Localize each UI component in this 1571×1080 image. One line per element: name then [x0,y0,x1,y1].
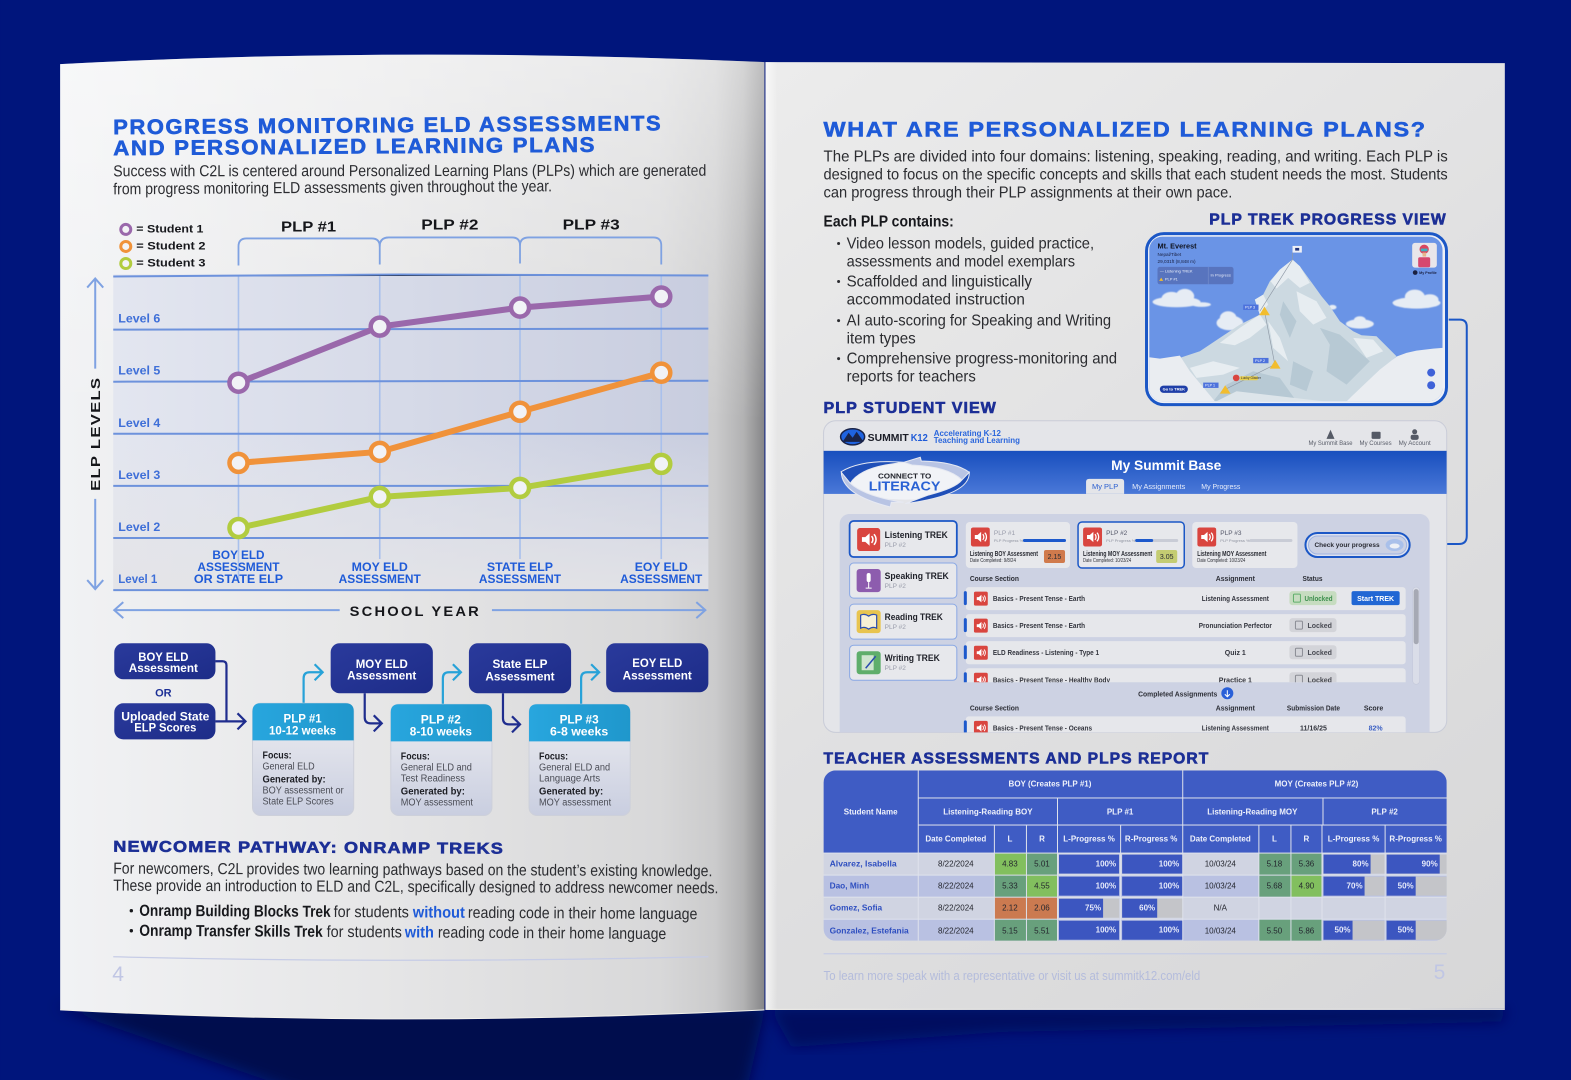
assignment table headers: Course Section [970,576,1019,583]
mountain trek view: My Profile [1419,271,1437,275]
x axis labels: ASSESSMENT [339,574,421,586]
summit logo: SUMMIT [868,433,909,444]
school year axis: SCHOOL YEAR [350,604,481,619]
teacher report table: L [1007,835,1012,844]
plp card 2: PLP #2 [1106,530,1128,537]
left page [60,55,764,1019]
progress bars [1059,855,1447,940]
card: plp 3: PLP #3 [560,714,599,726]
flow connectors [215,661,599,732]
title: progress monitoring: PROGRESS MONITORING ELD ASSESSMENTS [113,112,662,139]
table values: 5.86 [1299,927,1315,936]
blue banner: My Summit Base [1111,457,1221,473]
box: eoy eld: EOY ELD [632,658,682,670]
avatar [1412,243,1437,268]
heading: teacher report: TEACHER ASSESSMENTS AND PLPS REPORT [824,750,1209,767]
plp card 2: Date Completed: 10/23/24 [1083,558,1131,564]
plp flags: PLP 1 [1205,384,1215,388]
card: plp 2: Generated by: [401,785,465,797]
teacher report table: R-Progress % [1389,835,1442,844]
blue banner: My PLP [1092,482,1118,491]
progress bars: 100% [1159,926,1179,935]
assignment rows: Locked [1307,650,1332,657]
plp card 1: PLP #1 [994,530,1015,537]
intro text [113,162,706,198]
assignment rows: ELD Readiness - Listening - Type 1 [993,650,1099,657]
newcomer bullets: reading code in their home language [438,924,666,943]
table values: 5.33 [1002,882,1018,891]
teacher report table: Listening-Reading MOY [1207,808,1298,817]
newcomer paragraph: These provide an introduction to ELD and C2L, specifically designed to address newcomer needs. [113,877,718,897]
card: plp 1: State ELP Scores [263,795,334,807]
teacher report table: R [1039,835,1045,844]
top nav: My Courses [1360,441,1392,447]
level labels: Level 4 [118,418,161,430]
table values: 2.12 [1002,904,1018,913]
teacher report table: Date Completed [1190,835,1251,844]
student 3 line [229,455,670,537]
card: plp 2 [391,704,492,816]
mountain trek view: In Progress [1211,273,1231,278]
title: progress monitoring [113,112,662,160]
level labels [118,314,161,586]
teacher report table: R-Progress % [1125,835,1177,844]
legend: = Student 2 [136,240,205,252]
each plp contains list: assessments and model exemplars [847,252,1075,270]
x axis labels: ASSESSMENT [620,574,702,586]
plp card 2 [1078,522,1184,568]
top nav [1308,429,1431,447]
table header [824,770,1447,853]
table values: 5.18 [1267,860,1283,869]
box: uploaded state [114,703,215,739]
card: plp 1: 10-12 weeks [269,725,336,737]
table values: N/A [1214,904,1228,913]
assignment rows: Quiz 1 [1225,650,1246,657]
summit logo [841,428,1020,445]
trek tabs: PLP #2 [885,583,906,590]
level labels: Level 6 [118,314,160,326]
inner dashboard panel [840,514,1430,754]
intro paragraph [824,147,1448,201]
plp card 2: PLP Progress % [1106,538,1136,543]
card: plp 1: General ELD [263,760,315,772]
assignment table headers: Status [1302,576,1323,583]
newcomer bullets: Onramp Transfer Skills Trek [139,922,323,941]
progress bars: 100% [1096,860,1116,869]
assignment rows: Basics - Present Tense - Earth [993,596,1085,603]
box: uploaded state: ELP Scores [134,722,196,734]
table values: 5.15 [1002,927,1018,936]
page number 4: 4 [112,963,124,986]
teacher report table: R [1304,835,1310,844]
box: moy eld: MOY ELD [356,659,408,671]
progress bars: 90% [1422,860,1438,869]
student 2 line [229,364,670,472]
table values: 5.50 [1267,927,1283,936]
top nav: My Account [1399,441,1431,447]
box: uploaded state: Uploaded State [121,711,210,723]
blue banner: My Progress [1201,482,1241,491]
title: progress monitoring: AND PERSONALIZED LEARNING PLANS [113,134,596,160]
teacher report table [824,770,1447,941]
progress bars: 80% [1353,860,1369,869]
completed assignments: Submission Date [1287,705,1340,712]
line chart [113,275,708,590]
assignment rows [964,587,1406,691]
each plp contains list: Scaffolded and linguistically [847,273,1032,291]
table values: 8/22/2024 [938,927,974,936]
elp levels axis [87,279,103,589]
completed assignments: Score [1364,705,1383,712]
newcomer paragraph [113,860,718,897]
card: plp 1: Generated by: [263,773,326,785]
assignment rows: Basics - Present Tense - Earth [993,623,1085,630]
progress bars: 50% [1398,882,1414,891]
plp card 2: Listening MOY Assessment [1083,551,1153,558]
teacher report table: MOY (Creates PLP #2) [1275,779,1359,788]
intro text: Success with C2L is centered around Personalized Learning Plans (PLPs) which are generated [113,162,706,180]
assignment rows: Locked [1307,677,1332,684]
table values: 4.83 [1002,860,1018,869]
plp card 1: PLP Progress % [994,538,1024,543]
card: plp 2: Test Readiness [401,772,465,784]
blue banner: My Assignments [1132,482,1185,491]
plp card 3: PLP #3 [1220,530,1242,537]
plp brackets [238,216,661,265]
newcomer bullets: without [412,903,466,922]
trek tabs: Reading TREK [885,612,943,623]
table rows background [824,854,1447,941]
completed assignments: Listening Assessment [1202,725,1269,732]
progress bars: 100% [1159,882,1179,891]
table values: 8/22/2024 [938,882,974,891]
assignment rows: Locked [1307,623,1332,630]
level labels: Level 1 [118,574,158,586]
elp levels axis: ELP LEVELS [88,377,103,491]
teacher report table: Listening-Reading BOY [943,808,1033,817]
student names: Gonzalez, Estefania [830,926,909,936]
x axis labels: OR STATE ELP [194,574,283,586]
progress bars: 60% [1139,904,1155,913]
newcomer bullets: with [404,923,434,942]
connect to literacy logo [841,457,969,507]
card: plp 1 [253,703,354,816]
connector line [1411,320,1467,544]
plp card 1 [966,522,1070,568]
table values [938,860,1315,936]
newcomer bullets: for students [334,903,409,921]
right page [765,62,1505,1010]
check your progress pill [1305,533,1410,557]
x axis labels: MOY ELD [352,562,408,574]
card: plp 1: BOY assessment or [263,784,344,796]
level labels: Level 5 [118,366,161,378]
card: plp 3: Language Arts [539,772,600,784]
newcomer bullets: reading code in their home language [468,904,697,923]
progress bars: 75% [1085,904,1101,913]
table values: 10/03/24 [1205,860,1236,869]
plp flags: PLP 2 [1255,359,1265,363]
mountain trek view: — Listening TREK [1160,269,1193,274]
plp brackets: PLP #3 [563,216,620,233]
completed assignments: 11/16/25 [1300,725,1327,732]
box: boy eld [114,643,215,679]
x axis labels: BOY ELD [212,550,265,562]
student names: Gomez, Sofia [830,903,883,913]
teacher report table: L-Progress % [1063,835,1115,844]
card: plp 2: Focus: [401,750,430,762]
summit logo: Accelerating K-12 [934,428,1001,438]
table values: 5.36 [1299,860,1315,869]
connect to literacy logo: CONNECT TO [878,473,932,480]
level labels: Level 2 [118,522,160,534]
progress bars: 50% [1398,926,1414,935]
plp brackets: PLP #1 [281,218,336,235]
x axis labels [194,550,702,586]
footer note: To learn more speak with a representative or visit us at summitk12.com/eld [824,969,1200,983]
assignment rows: Unlocked [1304,596,1333,603]
progress bars: 100% [1159,860,1179,869]
each plp contains list: Comprehensive progress-monitoring and [847,350,1117,368]
box: moy eld: Assessment [347,670,416,682]
legend [121,223,205,269]
completed assignments [964,687,1406,732]
trek tabs: PLP #2 [885,624,906,631]
connect to literacy logo: LITERACY [869,478,941,493]
each plp contains list: reports for teachers [847,368,976,386]
heading: student view: PLP STUDENT VIEW [824,400,997,417]
box: moy eld [331,643,433,693]
table values: 5.51 [1034,927,1050,936]
assignment rows: Start TREK [1357,596,1394,603]
assignment rows: Basics - Present Tense - Healthy Body [993,677,1110,684]
box: boy eld: BOY ELD [138,652,188,664]
plp card 3: PLP Progress % [1220,538,1250,543]
student 1 line [229,288,670,392]
student view screenshot [824,421,1447,754]
title: what are plps: WHAT ARE PERSONALIZED LEARNING PLANS? [824,118,1427,141]
box: state elp: State ELP [492,659,548,671]
x axis labels: STATE ELP [487,562,553,574]
check your progress pill: Check your progress [1314,542,1380,549]
table values: 8/22/2024 [938,904,974,913]
table values: 5.68 [1267,882,1283,891]
completed assignments: Basics - Present Tense - Oceans [993,725,1092,732]
plp card 1: 2.15 [1048,554,1061,561]
plp flags: PLP 3 [1245,306,1255,310]
trek tabs: PLP #2 [885,542,906,549]
assignment rows: Practice 1 [1219,677,1252,684]
plp card 1: Date Completed: 9/8/24 [970,558,1016,564]
table values: 10/03/24 [1205,882,1236,891]
mountain trek view: Nepal/Tibet [1158,252,1182,257]
intro text: from progress monitoring ELD assessments given throughout the year. [113,177,552,198]
each plp contains list: AI auto-scoring for Speaking and Writing [847,312,1111,330]
trek tabs: Writing TREK [885,653,940,664]
teacher report table: BOY (Creates PLP #1) [1009,779,1092,788]
score cells [995,854,1321,941]
each plp contains list: accommodated instruction [847,291,1025,309]
plp card 2: 3.05 [1160,554,1174,561]
intro paragraph: The PLPs are divided into four domains: listening, speaking, reading, and writing. Each PLP is [824,147,1448,165]
intro paragraph: can progress through their PLP assignments at their own pace. [824,183,1232,201]
each plp contains list: Each PLP contains: [824,212,954,230]
card: plp 3: Focus: [539,750,568,762]
trek tabs [850,521,957,680]
blue banner [824,451,1447,494]
intro paragraph: designed to focus on the specific concepts and skills that each student needs the most. Students [824,165,1448,183]
card: plp 2: General ELD and [401,761,472,773]
mountain [1180,260,1397,401]
each plp contains list [824,212,1117,386]
school year axis [114,602,705,619]
level labels: Level 3 [118,470,160,482]
completed assignments: Completed Assignments [1138,689,1217,698]
table values: 5.01 [1034,860,1050,869]
student names: Alvarez, Isabella [830,859,897,869]
newcomer bullets [130,902,697,943]
card: plp 3: MOY assessment [539,796,611,808]
mountain trek view: PLP #1 [1165,277,1179,282]
card: plp 3: General ELD and [539,761,610,773]
teacher report table: Date Completed [925,835,986,844]
summit logo: K12 [911,433,928,444]
legend: = Student 1 [136,223,203,235]
table values: 10/03/24 [1205,927,1236,936]
progress bars: 50% [1335,926,1351,935]
box: eoy eld: Assessment [623,670,692,682]
card: plp 2: PLP #2 [421,714,461,726]
table values: 4.90 [1299,882,1315,891]
or label: OR [155,687,172,699]
box: boy eld: Assessment [129,663,198,675]
each plp contains list: item types [847,330,916,348]
plp brackets: PLP #2 [421,216,478,233]
student names: Dao, Minh [830,881,869,891]
mountain trek view: Go to TREK [1163,387,1185,392]
student names [830,859,909,936]
box: eoy eld [606,643,708,692]
x axis labels: ASSESSMENT [197,562,280,574]
progress bars: 100% [1096,926,1116,935]
box: state elp [469,643,571,693]
card: plp 3: Generated by: [539,785,603,797]
newcomer heading: NEWCOMER PATHWAY: ONRAMP TREKS [113,839,504,858]
plp flags [1203,305,1269,388]
teacher report table: PLP #2 [1371,808,1398,817]
flow diagram [114,643,708,816]
page shadows [55,1007,1508,1080]
mountain trek view: 29,031ft (8,848 m) [1158,259,1196,264]
card: plp 2: 8-10 weeks [410,726,472,738]
card: plp 1: PLP #1 [284,713,322,725]
card: plp 3 [529,704,630,816]
teacher report table: PLP #1 [1107,808,1134,817]
completed assignments: Assignment [1216,705,1256,712]
newcomer bullets: Onramp Building Blocks Trek [139,902,331,921]
assignment rows: Listening Assessment [1202,596,1269,603]
trek tabs: Speaking TREK [885,571,949,582]
teacher report table: Student Name [844,808,898,817]
mountain trek view [1147,234,1447,405]
plp card 3 [1192,522,1297,568]
summit logo: Teaching and Learning [934,435,1020,445]
progress bars: 100% [1096,882,1116,891]
trek tabs: PLP #2 [885,665,906,672]
table values: 8/22/2024 [938,860,974,869]
mountain trek view: Mt. Everest [1158,242,1197,251]
plp card 3: Listening MOY Assessment [1197,551,1267,558]
plp card 3: Date Completed: 10/23/24 [1197,558,1246,564]
mountain trek view: Lucky Glacier [1241,376,1262,380]
plp card 1: Listening BOY Assessment [970,551,1038,558]
teacher report table: L-Progress % [1328,835,1379,844]
completed assignments: 82% [1369,725,1383,732]
assignment table headers: Assignment [1216,576,1256,583]
heading: trek progress: PLP TREK PROGRESS VIEW [1209,211,1447,228]
card: plp 1: Focus: [263,749,292,761]
card: plp 2: MOY assessment [401,796,473,808]
box: state elp: Assessment [485,671,555,683]
teacher report table: L [1272,835,1277,844]
card: plp 3: 6-8 weeks [550,726,608,738]
table values: 2.06 [1034,904,1050,913]
scrollbar [1413,587,1420,684]
top nav: My Summit Base [1308,441,1353,447]
page number 5: 5 [1434,961,1445,984]
newcomer bullets: for students [327,923,402,941]
table values: 4.55 [1034,882,1050,891]
x axis labels: ASSESSMENT [479,574,561,586]
newcomer paragraph: For newcomers, C2L provides two learning pathways based on the student’s existing knowledge. [113,860,712,880]
assignment rows: Pronunciation Perfector [1199,623,1272,630]
trek tabs: Listening TREK [885,530,948,541]
tents [1220,307,1281,394]
clouds [1153,289,1441,330]
each plp contains list: Video lesson models, guided practice, [847,234,1094,252]
completed assignments: Course Section [970,705,1019,712]
legend: = Student 3 [136,257,205,269]
progress bars: 70% [1347,882,1363,891]
assignment table headers [970,576,1323,583]
x axis labels: EOY ELD [635,562,688,574]
